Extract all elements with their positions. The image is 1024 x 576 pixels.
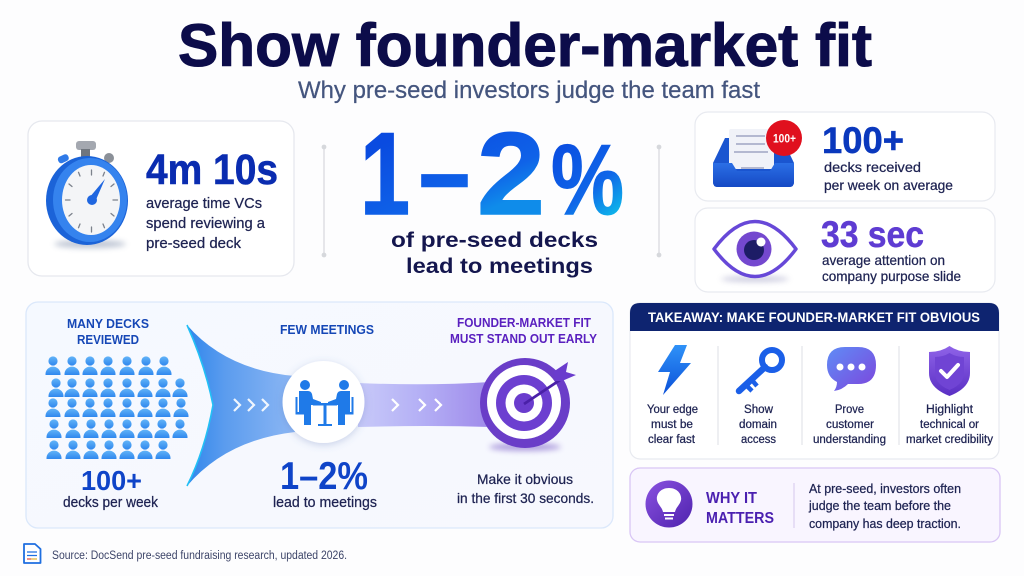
stat description: pre-seed deck xyxy=(146,235,241,252)
purple band xyxy=(358,382,490,427)
panel: why it matters xyxy=(630,468,1000,542)
item: domain access: access xyxy=(741,434,776,446)
heading: why it matters xyxy=(706,490,774,527)
panel: attention time xyxy=(695,208,995,292)
funnel shape xyxy=(187,325,295,486)
stat description: per week on average xyxy=(824,177,953,193)
item: credibility: market credibility xyxy=(906,434,993,446)
item: customer understanding xyxy=(813,347,886,446)
subtitle: Why pre-seed investors judge the team fast xyxy=(298,77,760,104)
heading: why it matters: WHY IT xyxy=(706,490,757,507)
item: your edge xyxy=(647,345,698,446)
body text xyxy=(808,481,961,531)
item: your edge: must be xyxy=(651,419,693,431)
panel: decks received xyxy=(695,112,995,201)
heading: few meetings: FEW MEETINGS xyxy=(280,323,374,337)
heading: many decks reviewed xyxy=(67,317,149,347)
headline caption: lead to meetings xyxy=(406,254,593,278)
headline stat: 1–2% xyxy=(360,106,624,278)
takeaway header bar xyxy=(630,303,999,331)
takeaway header bar: TAKEAWAY: MAKE FOUNDER-MARKET FIT OBVIOUS xyxy=(648,309,980,325)
item: domain access: domain xyxy=(739,419,777,431)
item: customer understanding: Prove xyxy=(835,404,864,416)
icon grid: people xyxy=(45,356,189,459)
stat description xyxy=(146,195,266,252)
item: customer understanding: understanding xyxy=(813,434,886,446)
icon: document xyxy=(24,544,40,563)
stat value: 4m 10s xyxy=(146,146,278,194)
item: credibility: technical or xyxy=(920,419,979,431)
item: domain access: Show xyxy=(744,404,774,416)
headline stat: 1–2%: 2 xyxy=(477,108,545,239)
body text: At pre-seed, investors often xyxy=(809,481,961,496)
headline stat: 1–2%: – xyxy=(419,106,470,237)
icon: meeting in a circle xyxy=(282,361,364,443)
stat: 100+ decks per week: 100+ xyxy=(81,465,142,496)
heading: founder-market fit: FOUNDER-MARKET FIT xyxy=(457,316,591,330)
icon: inbox tray with badge xyxy=(713,120,802,187)
body text: judge the team before the xyxy=(808,498,951,513)
icon: eye xyxy=(714,222,796,282)
heading: many decks reviewed: MANY DECKS xyxy=(67,317,149,331)
caption: make it obvious: in the first 30 seconds. xyxy=(457,490,594,506)
stat description: spend reviewing a xyxy=(146,215,266,232)
item: your edge: clear fast xyxy=(648,434,696,446)
icon: stopwatch xyxy=(46,141,128,248)
icon: lightbulb xyxy=(646,480,692,528)
stat description xyxy=(822,252,961,284)
item: your edge: Your edge xyxy=(647,404,698,416)
stat description: decks received xyxy=(824,159,921,175)
stat: 100+ decks per week xyxy=(63,465,159,511)
panel: takeaway xyxy=(630,303,999,459)
item: credibility: Highlight xyxy=(926,404,974,416)
stat description: average time VCs xyxy=(146,195,262,212)
title: Show founder-market fit xyxy=(178,12,872,79)
item: customer understanding: customer xyxy=(826,419,874,431)
heading: founder-market fit: MUST STAND OUT EARLY xyxy=(450,332,598,346)
icon: inbox tray with badge: 100+ xyxy=(773,134,796,146)
headline stat: 1–2%: % xyxy=(551,124,624,236)
stat: 100+ decks per week: decks per week xyxy=(63,495,159,511)
stat: 1–2% lead to meetings: lead to meetings xyxy=(273,495,377,511)
heading: many decks reviewed: REVIEWED xyxy=(77,333,139,347)
panel: review time stat xyxy=(28,121,294,276)
heading: founder-market fit xyxy=(450,316,598,346)
stat description: company purpose slide xyxy=(822,268,961,284)
stat description xyxy=(824,159,953,193)
stat value: 100+ xyxy=(822,120,904,161)
headline stat: 1–2%: 1 xyxy=(360,108,410,239)
headline caption xyxy=(391,228,598,278)
heading: why it matters: MATTERS xyxy=(706,510,774,527)
caption: make it obvious xyxy=(457,471,594,506)
caption: make it obvious: Make it obvious xyxy=(477,471,573,487)
source note: Source: DocSend pre-seed fundraising research, updated 2026. xyxy=(52,550,347,562)
headline caption: of pre-seed decks xyxy=(391,228,598,252)
item: domain access xyxy=(739,350,782,446)
body text: company has deep traction. xyxy=(809,516,961,531)
icon: target with arrow xyxy=(480,358,576,451)
stat: 1–2% lead to meetings: 1–2% xyxy=(280,455,368,498)
stat description: average attention on xyxy=(822,252,945,268)
stat value: 33 sec xyxy=(821,214,924,255)
panel: funnel flow xyxy=(26,302,613,528)
item: credibility xyxy=(906,346,993,446)
